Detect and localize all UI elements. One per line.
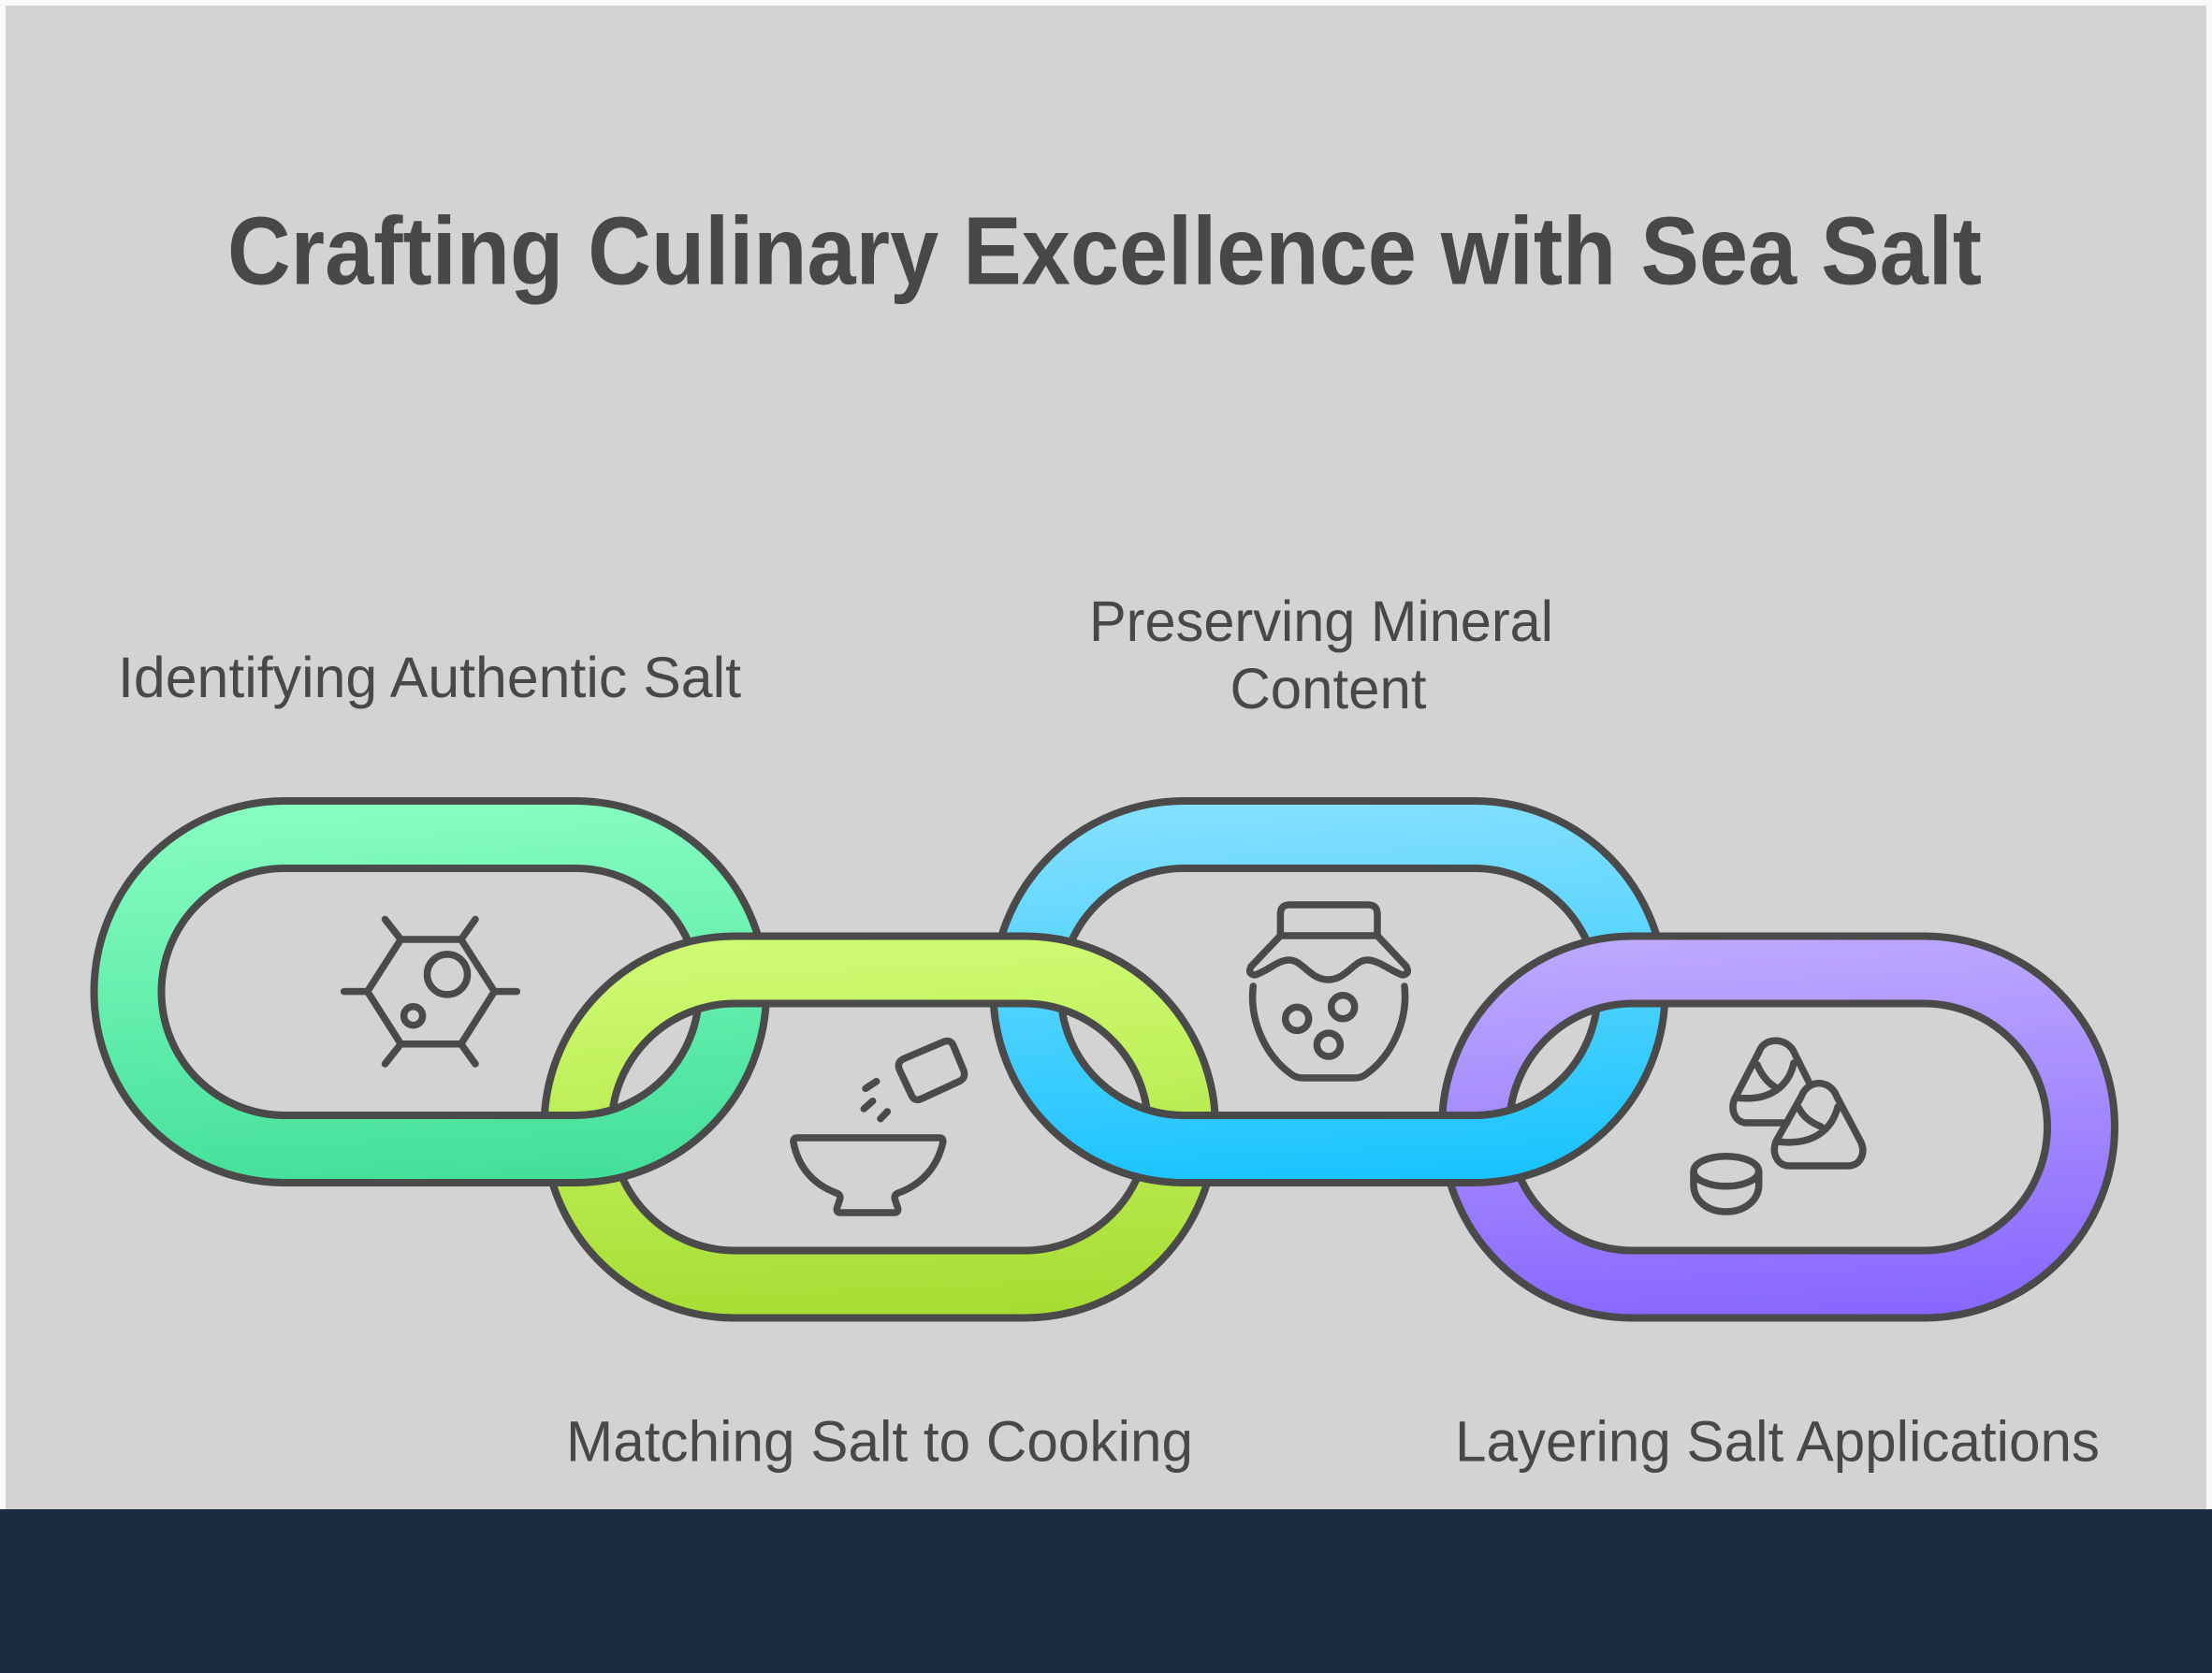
chain link: lime	[545, 936, 1215, 1317]
icon: salt crystal hexagon	[344, 919, 517, 1064]
icon: jar with minerals	[1250, 905, 1407, 1078]
chain link: purple	[1442, 936, 2115, 1317]
title: Crafting Culinary Excellence with Sea Salt	[227, 196, 1982, 305]
label: Preserving Mineral Content	[1089, 589, 1553, 720]
label: Preserving Mineral Content: Preserving Mineral	[1089, 589, 1553, 653]
icon: salt piles and small bowl	[1694, 1040, 1863, 1212]
label: Matching Salt to Cooking: Matching Salt to Cooking	[566, 1409, 1193, 1473]
label: Identifying Authentic Salt: Identifying Authentic Salt	[118, 646, 741, 709]
label: Preserving Mineral Content: Content	[1230, 657, 1427, 720]
footer band	[0, 1509, 2212, 1673]
chain link: green	[95, 801, 766, 1183]
green link lower crossing over lime	[109, 1076, 750, 1186]
blue link lower crossing over lime and purple	[1009, 1076, 1650, 1186]
icon: salt shaker over bowl	[793, 1041, 965, 1213]
chain link: blue	[994, 801, 1666, 1183]
label: Layering Salt Applications: Layering Salt Applications	[1455, 1409, 2100, 1473]
